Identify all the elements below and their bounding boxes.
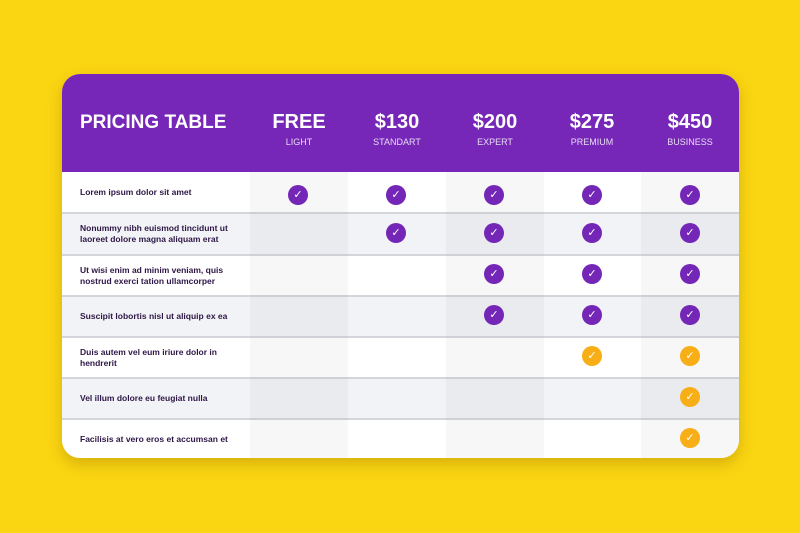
price: 130: $130: [375, 111, 419, 133]
price: 130: STANDART: [373, 137, 421, 147]
check marks: [288, 185, 700, 448]
pricing table card: ✓: [685, 432, 695, 444]
price: 275: PREMIUM: [571, 137, 613, 147]
pricing table card: ✓: [587, 309, 597, 321]
column shading: [250, 172, 348, 458]
row 1: [62, 172, 739, 214]
price: 275: [570, 111, 614, 147]
row 4: [62, 297, 739, 338]
pricing table card: ✓: [587, 227, 597, 239]
row 3: [62, 256, 739, 297]
row 7: [62, 420, 739, 460]
pricing table card: ✓: [391, 227, 401, 239]
row 3: nostrud exerci tation ullamcorper: [80, 276, 215, 286]
row 4: Suscipit lobortis nisl ut aliquip ex ea: [80, 311, 227, 321]
price: 200: EXPERT: [477, 137, 513, 147]
pricing table card: ✓: [489, 309, 499, 321]
pricing table card: ✓: [587, 350, 597, 362]
price: 200: [473, 111, 517, 147]
price: free: [272, 111, 326, 147]
pricing table card: [62, 74, 739, 458]
pricing table card: ✓: [489, 189, 499, 201]
row 3: Ut wisi enim ad minim veniam, quis: [80, 265, 223, 275]
row 6: [62, 379, 739, 420]
row 5: [62, 338, 739, 379]
pricing table card: ✓: [587, 268, 597, 280]
price: 450: $450: [668, 111, 712, 133]
pricing table card: ✓: [685, 189, 695, 201]
row 5: Duis autem vel eum iriure dolor in: [80, 347, 217, 357]
price: 130: [373, 111, 421, 147]
price: free: FREE: [272, 111, 326, 133]
pricing table card: ✓: [685, 391, 695, 403]
pricing table card: ✓: [293, 189, 303, 201]
pricing table card: ✓: [685, 268, 695, 280]
price: 450: [667, 111, 713, 147]
pricing table card: ✓: [685, 227, 695, 239]
row 1: Lorem ipsum dolor sit amet: [80, 187, 191, 197]
pricing table card: ✓: [489, 268, 499, 280]
price: 200: $200: [473, 111, 517, 133]
pricing table card: ✓: [391, 189, 401, 201]
header: [62, 74, 739, 172]
price: 450: BUSINESS: [667, 137, 713, 147]
title: PRICING TABLE: [80, 112, 226, 133]
pricing table card: ✓: [685, 350, 695, 362]
row 5: hendrerit: [80, 358, 117, 368]
price: 275: $275: [570, 111, 614, 133]
row 2: laoreet dolore magna aliquam erat: [80, 234, 218, 244]
pricing table card: ✓: [587, 189, 597, 201]
row 7: Facilisis at vero eros et accumsan et: [80, 434, 228, 444]
row 6: Vel illum dolore eu feugiat nulla: [80, 393, 208, 403]
price: free: LIGHT: [286, 137, 312, 147]
pricing table card: ✓: [489, 227, 499, 239]
row 2: Nonummy nibh euismod tincidunt ut: [80, 223, 228, 233]
row 2: [62, 214, 739, 256]
pricing table card: ✓: [685, 309, 695, 321]
